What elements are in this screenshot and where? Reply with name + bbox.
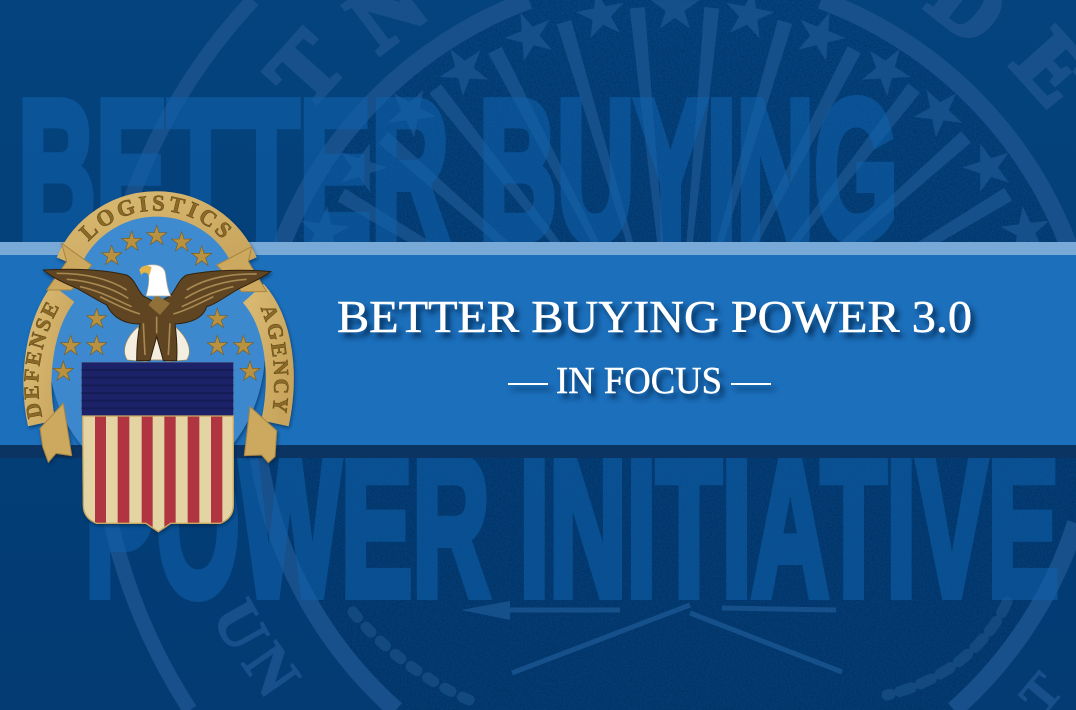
seal arrows bbox=[461, 601, 842, 673]
scroll text: LOGISTICS bbox=[78, 195, 232, 242]
seal ring letters: T bbox=[247, 12, 363, 126]
scroll: right bbox=[253, 293, 280, 423]
scroll text: DEFENSE bbox=[24, 302, 60, 420]
emblem: Defense Logistics Agency bbox=[22, 191, 296, 536]
eagle feather highlights bbox=[57, 273, 257, 355]
eagle chest bbox=[148, 295, 170, 315]
band main bbox=[0, 255, 1076, 445]
eagle head bbox=[142, 265, 171, 296]
band dark bottom stripe bbox=[0, 445, 1076, 458]
seal outer ring bbox=[97, 0, 253, 710]
seal rays bbox=[308, 7, 1042, 352]
emblem stars bbox=[53, 225, 260, 380]
emblem blue disc bbox=[48, 210, 265, 483]
title: BETTER BUYING POWER 3.0 bbox=[337, 291, 972, 342]
eagle wings and body bbox=[43, 269, 271, 361]
subtitle text: IN FOCUS bbox=[556, 360, 722, 402]
subtitle left dash bbox=[508, 383, 548, 385]
scroll folds and tails bbox=[40, 243, 277, 463]
seal inner texture bbox=[254, 0, 1076, 710]
seal stars bbox=[291, 0, 1059, 262]
scroll: top bbox=[68, 204, 245, 262]
shield chief bbox=[82, 362, 233, 416]
scroll text bbox=[24, 195, 289, 420]
shield chief ribs bbox=[82, 370, 233, 408]
title band bbox=[0, 242, 1076, 458]
eagle bbox=[43, 265, 271, 362]
scroll: left bbox=[38, 293, 63, 423]
subtitle right dash bbox=[731, 383, 771, 385]
seal olive branches bbox=[353, 602, 1007, 702]
scroll text: AGENCY bbox=[260, 308, 289, 414]
band light top stripe bbox=[0, 242, 1076, 255]
shield outline bbox=[83, 416, 233, 532]
shield stripes bbox=[83, 416, 234, 533]
eagle beak bbox=[139, 266, 152, 275]
seal ring letters: N bbox=[229, 630, 314, 709]
shield bbox=[82, 362, 234, 533]
seal inner ring bbox=[254, 0, 1076, 710]
seal ring letters: U bbox=[198, 588, 283, 663]
eagle white tail feathers bbox=[125, 327, 189, 362]
